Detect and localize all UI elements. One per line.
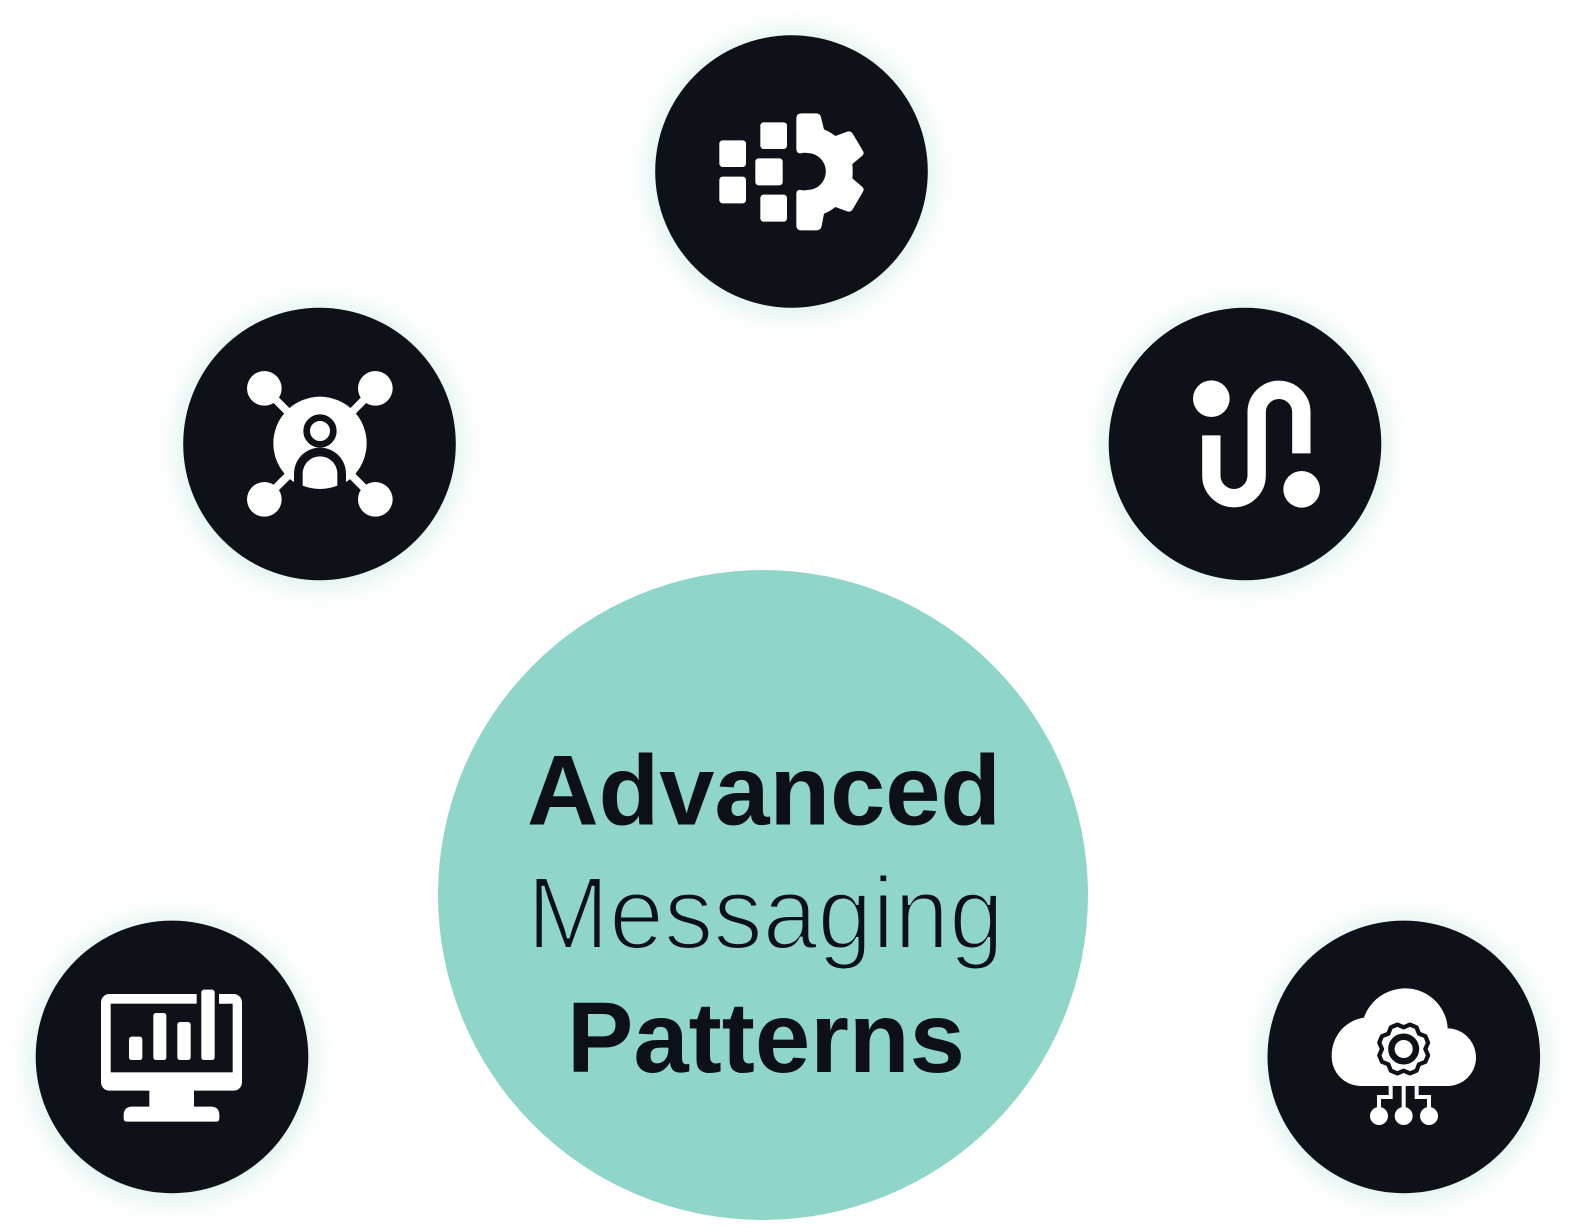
node: top, data and gear [655, 35, 928, 308]
dark circle [1268, 921, 1540, 1193]
icon: route with two dots [1193, 380, 1320, 508]
icon: squares and gear [719, 113, 864, 230]
icon: cloud with gear and circuit [1332, 988, 1476, 1125]
title line: Patterns: Patterns [567, 982, 965, 1094]
title line: Advanced: Advanced [527, 734, 1001, 846]
dark circle [36, 921, 308, 1193]
icon: user hub with four satellites [247, 371, 393, 517]
central teal circle with title [438, 570, 1088, 1220]
title line: Messaging: Messaging [527, 856, 1004, 970]
dark circle [655, 35, 928, 308]
node: left, user network [183, 308, 456, 580]
icon: monitor with bar chart [101, 990, 242, 1122]
node: bottom right, cloud gear [1268, 921, 1540, 1193]
node: bottom left, monitor chart [36, 921, 308, 1193]
teal circle [438, 570, 1088, 1220]
dark circle [1109, 308, 1381, 580]
title [527, 734, 1004, 1094]
dark circle [183, 308, 456, 580]
node: right, route path [1109, 308, 1381, 580]
